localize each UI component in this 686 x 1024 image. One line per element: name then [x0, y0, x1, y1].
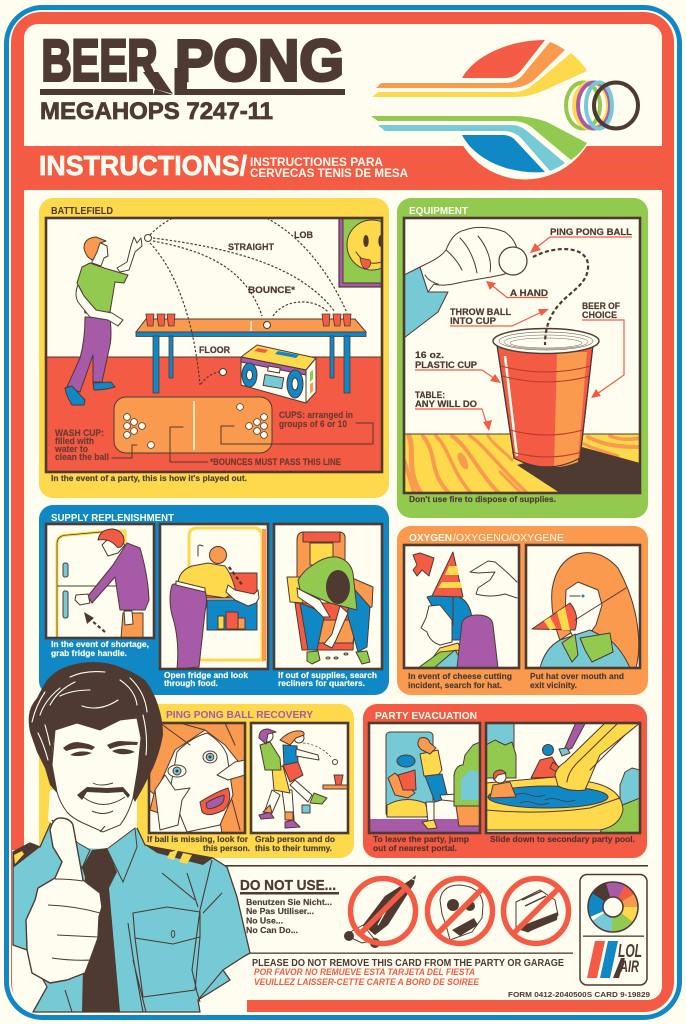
face	[52, 718, 141, 832]
panel: party evacuation: out of nearest portal.	[373, 843, 457, 853]
shirt	[13, 820, 250, 1012]
scene: party room: filled with	[55, 436, 94, 446]
scene: party room: CUPS: arranged in	[279, 410, 353, 420]
section rules	[225, 865, 648, 954]
brand badge: LOL Air	[580, 874, 647, 985]
callouts: ANY WILL DO	[415, 399, 477, 409]
panel: supply replenishment: through food.	[164, 678, 218, 688]
nose and mustache	[77, 787, 130, 800]
callouts: THROW BALL	[450, 307, 511, 317]
epaulets	[13, 843, 213, 868]
panel: ping pong ball recovery: Grab person and do	[255, 834, 335, 844]
heading: battlefield: BATTLEFIELD	[51, 205, 113, 217]
collars	[52, 820, 137, 882]
caption: Put hat over mouth and	[530, 671, 624, 681]
thrower figure	[65, 237, 142, 405]
heading: oxygen: OXYGEN	[409, 532, 452, 544]
scene: party room	[46, 208, 397, 472]
heading: instructions	[39, 150, 408, 181]
icon: smiley poster	[338, 219, 381, 288]
scene: search recliner	[274, 524, 382, 669]
do not use translations: Ne Pas Utiliser...	[246, 906, 314, 916]
panel: ping pong ball recovery: this person.	[203, 843, 250, 853]
caption: Don't use fire to dispose of supplies.	[409, 494, 556, 504]
icon: no lawnmower	[344, 875, 417, 948]
panel: party evacuation	[363, 704, 647, 858]
panel: equipment	[397, 198, 648, 518]
panel: supply replenishment: grab fridge handle.	[51, 648, 127, 658]
callouts: BEER OF	[582, 301, 620, 311]
callouts: A HAND	[510, 288, 549, 298]
heading: party evacuation: PARTY EVACUATION	[375, 710, 477, 722]
notice: do not remove card	[252, 958, 564, 987]
do not use translations	[246, 897, 332, 935]
scene: screaming face	[149, 723, 245, 833]
callouts: INTO CUP	[450, 316, 496, 326]
callouts: CHOICE	[582, 310, 617, 320]
caption: If ball is missing, look for	[147, 834, 249, 844]
panel: battlefield	[39, 198, 397, 498]
subtitle: Megahops: MEGAHOPS 7247-11	[40, 98, 273, 125]
heading: supply replenishment: SUPPLY REPLENISHMENT	[51, 512, 175, 524]
labels: LOB	[294, 230, 313, 240]
callouts	[415, 227, 633, 431]
panel: ping pong ball recovery: this to their tummy.	[255, 843, 332, 853]
form number: FORM 0412-2040500S CARD 9-19829	[508, 990, 650, 999]
scene: grab fridge handle	[46, 524, 154, 638]
tie	[82, 848, 120, 1012]
do not use translations: No Use...	[246, 916, 283, 926]
icon: no skull	[428, 878, 492, 944]
neck	[48, 790, 137, 849]
caption: In event of cheese cutting	[408, 671, 512, 681]
panel: supply replenishment: recliners for quarters.	[278, 678, 365, 688]
do not use translations: Benutzen Sie Nicht...	[246, 897, 332, 907]
scene: party room: water to	[54, 444, 88, 454]
icon: camera aperture	[588, 882, 639, 933]
hair highlights	[32, 672, 147, 760]
title: Beer Pong: PONG	[175, 28, 344, 94]
wordmark stripes	[587, 941, 625, 978]
panel: ping pong ball recovery	[39, 704, 354, 858]
caption: To leave the party, jump	[373, 834, 469, 844]
table	[136, 319, 366, 393]
scene: party room: BOUNCE*	[248, 285, 296, 295]
thumbs-up hand	[26, 818, 102, 983]
callouts: TABLE:	[415, 390, 445, 400]
title: Beer Pong: BEER	[42, 28, 158, 94]
throw trajectories	[150, 208, 347, 385]
scene: party room: *BOUNCES MUST PASS THIS LINE	[210, 457, 341, 467]
panel: oxygen: incident, search for hat.	[408, 680, 502, 690]
scene: slide and pool	[486, 720, 640, 833]
heading: instructions: INSTRUCTIONES PARA	[250, 157, 383, 169]
notice: do not remove card: PLEASE DO NOT REMOVE THIS CARD FROM THE PARTY OR GARAGE	[252, 958, 564, 969]
callouts: 16 oz.	[415, 350, 444, 360]
panel: oxygen	[397, 526, 648, 695]
heading: instructions: CERVECAS TENIS DE MESA	[250, 168, 408, 180]
wood table	[404, 434, 640, 495]
heading: oxygen: /OXYGENO/OXYGENE	[453, 532, 564, 544]
notice: do not remove card: POR FAVOR NO REMUEVE ESTA TARJETA DEL FIESTA	[254, 967, 475, 977]
shirt details	[65, 860, 223, 1012]
airline logo	[360, 32, 638, 180]
callouts: PLASTIC CUP	[415, 360, 477, 370]
scene: cup and throw	[404, 218, 640, 495]
caption: Open fridge and look	[164, 670, 248, 680]
panel: oxygen: exit vicinity.	[530, 680, 577, 690]
icon: no toaster	[504, 878, 568, 944]
title: Beer Pong	[40, 28, 345, 95]
scene: party room: STRAIGHT	[228, 242, 274, 252]
panel: supply replenishment	[39, 505, 389, 695]
callouts: PING PONG BALL	[550, 227, 633, 237]
caption: In the event of shortage,	[51, 639, 149, 649]
table plan diagram	[112, 397, 373, 462]
ball flight path	[533, 249, 588, 345]
do not use heading: DO NOT USE...	[240, 877, 336, 894]
heading: instructions: INSTRUCTIONS/	[39, 150, 247, 181]
red cups	[146, 314, 351, 326]
scene: party room: WASH CUP:	[55, 428, 104, 438]
pilot figure	[13, 662, 250, 1012]
scene: party room: FLOOR	[199, 345, 230, 355]
notice: do not remove card: VEUILLEZ LAISSER-CETTE CARTE A BORD DE SOIREE	[254, 977, 480, 987]
eyebrows and eyes	[63, 741, 138, 756]
icon: red plastic cup	[493, 328, 599, 467]
scene: party room: clean the ball	[55, 452, 109, 462]
heading: equipment: EQUIPMENT	[409, 205, 469, 217]
scene: search for hat	[404, 545, 519, 668]
brand badge: LOL Air: LOL	[618, 941, 642, 961]
hair	[29, 662, 163, 802]
caption: In the event of a party, this is how it's played out.	[51, 473, 247, 483]
scene: open fridge	[160, 524, 268, 669]
scene: party room: groups of 6 or 10	[279, 419, 347, 429]
caption: If out of supplies, search	[278, 670, 377, 680]
heading: recovery: PING PONG BALL RECOVERY	[166, 709, 313, 721]
do not use translations: No Can Do...	[246, 925, 298, 935]
scene: hat over mouth	[526, 545, 640, 668]
icon: hand and ball	[404, 227, 527, 338]
brand badge: LOL Air: AIR	[619, 957, 639, 976]
scene: heimlich figures	[251, 723, 349, 833]
scene: jump out of portal	[369, 723, 480, 833]
panel: party evacuation: Slide down to secondary party pool.	[490, 834, 635, 844]
boombox	[241, 345, 316, 403]
